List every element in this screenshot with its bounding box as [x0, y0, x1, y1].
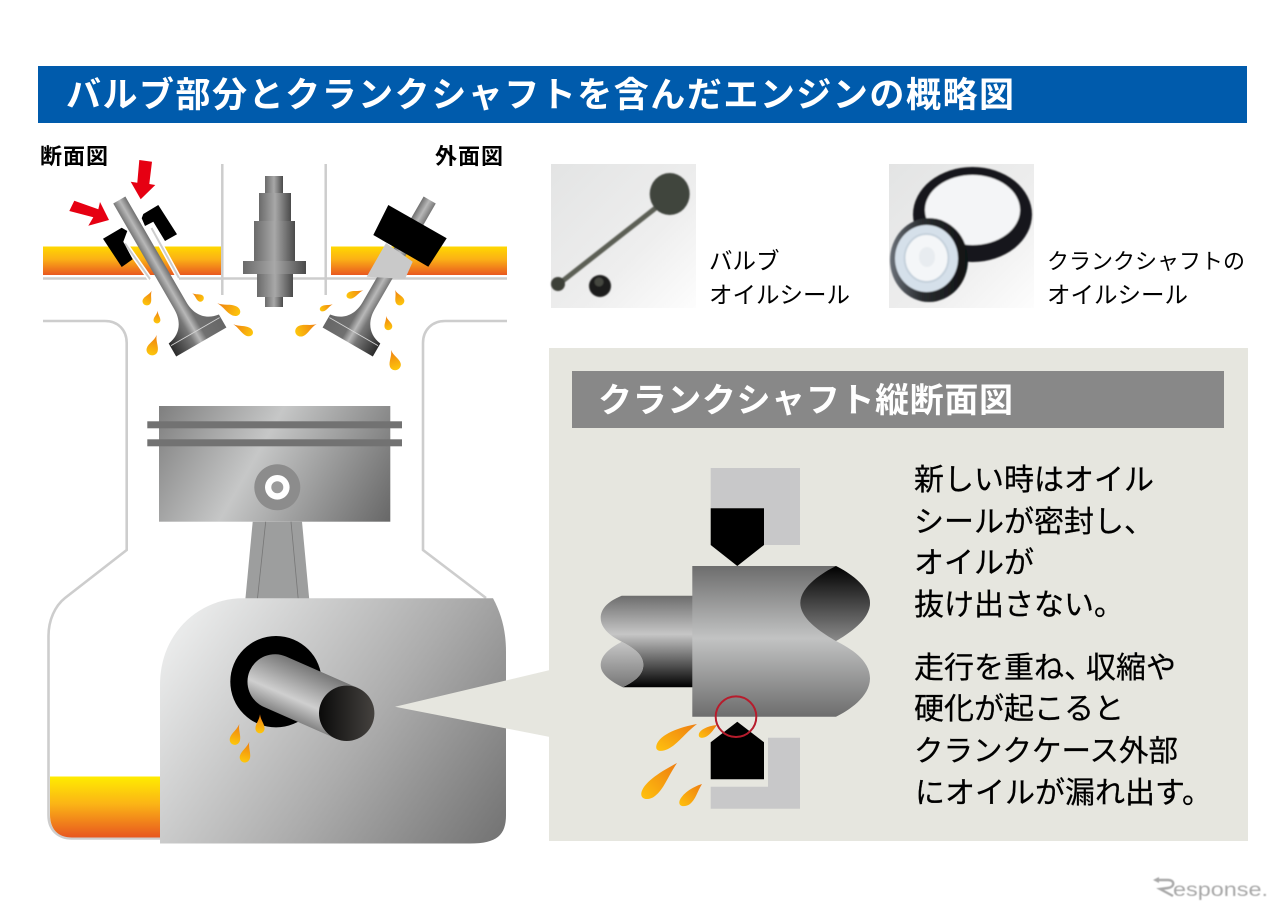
label: exterior: 外面図 — [435, 144, 503, 169]
upper seal — [711, 508, 764, 566]
left valve guide lines — [125, 228, 179, 279]
label: valve oil seal: バルブ — [709, 248, 780, 274]
callout pointer — [395, 670, 550, 737]
text: aged seal: にオイルが漏れ出す。 — [915, 777, 1212, 810]
watermark: esponse. — [1173, 880, 1268, 901]
upper housing — [711, 468, 800, 545]
oil sump — [50, 776, 162, 838]
section diagram — [601, 468, 870, 809]
engine diagram — [43, 160, 507, 844]
crankshaft with black oil seal — [230, 636, 374, 741]
leaking oil drops — [641, 724, 717, 806]
label: cross section: 断面図 — [40, 144, 108, 169]
connecting rod — [245, 522, 309, 600]
lower seal — [711, 722, 764, 779]
label: crankshaft oil seal: オイルシール — [1047, 282, 1188, 308]
title banner — [38, 66, 1247, 123]
small shaft — [601, 596, 693, 687]
crankcase — [160, 598, 506, 844]
right valve guide — [367, 243, 413, 279]
right valve oil seal — [373, 205, 447, 267]
cylinder head walls — [43, 164, 507, 838]
left valve — [94, 186, 226, 357]
spark plug — [243, 176, 306, 307]
title banner: バルブ部分とクランクシャフトを含んだエンジンの概略図 — [66, 75, 1014, 115]
photo: valve oil seal — [551, 164, 696, 308]
leak highlight circle — [716, 696, 756, 737]
main shaft — [692, 566, 870, 717]
text: aged seal: クランクケース外部 — [914, 735, 1178, 768]
text: new seal: 抜け出さない。 — [914, 589, 1124, 622]
text: new seal: シールが密封し、 — [914, 506, 1154, 539]
text: new seal: オイルが — [914, 547, 1034, 580]
red arrows — [69, 160, 155, 226]
right valve — [323, 186, 455, 357]
lower housing — [711, 738, 800, 809]
photo: crankshaft oil seal — [889, 164, 1034, 308]
text: new seal: 新しい時はオイル — [914, 464, 1154, 497]
text: aged seal: 硬化が起こると — [914, 693, 1124, 726]
panel: crankshaft longitudinal section — [549, 348, 1248, 841]
text: aged seal: 収縮や — [1086, 652, 1176, 685]
panel heading — [572, 371, 1224, 428]
left valve oil seal — [103, 205, 177, 267]
oil drops under crankshaft — [228, 714, 265, 764]
label: valve oil seal: オイルシール — [709, 282, 850, 308]
oil drops around valves — [141, 287, 406, 372]
piston — [147, 406, 402, 522]
panel heading: クランクシャフト縦断面図 — [598, 382, 1013, 420]
label: crankshaft oil seal: クランクシャフトの — [1047, 249, 1245, 274]
oil bands in cylinder head — [43, 246, 507, 275]
watermark — [1153, 877, 1268, 901]
text: aged seal: 走行を重ね、 — [914, 652, 1094, 685]
